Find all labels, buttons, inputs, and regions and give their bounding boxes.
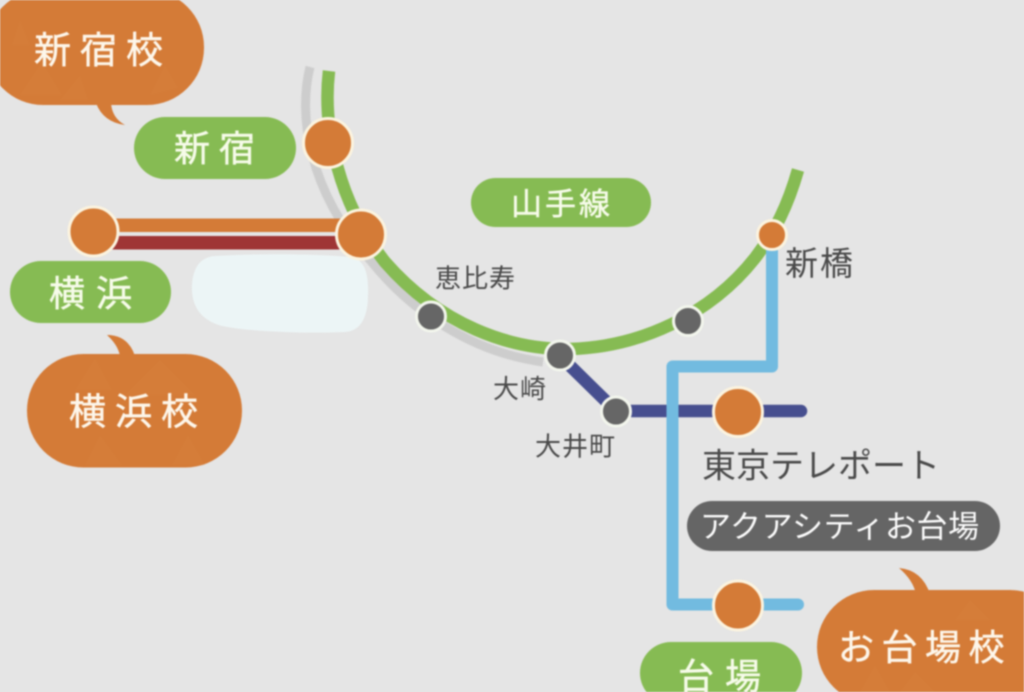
- Rinkai blue line: [672, 240, 798, 604]
- label: Shinjuku: 新宿: [174, 128, 264, 169]
- label: Yamanote line: 山手線: [511, 187, 613, 222]
- label: Shimbashi: 新橋: [785, 245, 855, 282]
- Oimachi navy line: [560, 356, 801, 411]
- label: Aqua City Odaiba: [687, 501, 1000, 551]
- callout: Odaiba school: [817, 568, 1024, 692]
- label: Aqua City Odaiba: アクアシティお台場: [700, 510, 980, 544]
- label: Yamanote line: [471, 178, 651, 227]
- station: upper right gray: [674, 306, 702, 336]
- label: Oimachi: 大井町: [535, 432, 616, 462]
- station: Shibuya junction: [336, 210, 386, 259]
- station: Oimachi: [602, 397, 630, 426]
- label: Shinjuku: [134, 117, 296, 179]
- label: Tokyo Teleport: 東京テレポート: [702, 448, 940, 486]
- station: Ebisu: [416, 302, 446, 331]
- label: Yokohama: [10, 261, 171, 323]
- station: Osaki: [546, 341, 574, 370]
- label: Yokohama: 横浜: [49, 273, 143, 314]
- Yokohama orange line: [110, 218, 345, 232]
- Yokohama red line: [110, 236, 345, 250]
- gray parallel track: [306, 67, 543, 362]
- station: Daiba: [714, 581, 762, 630]
- callout: Yokohama school: 横浜校: [69, 392, 207, 432]
- station: Tokyo Teleport: [714, 388, 762, 436]
- Yamanote line green track: [328, 71, 798, 349]
- callout: Yokohama school: [27, 335, 242, 468]
- station: Shinjuku: [304, 118, 352, 168]
- pale cloud patch: [192, 254, 368, 333]
- callout: Shinjuku school: [0, 0, 204, 125]
- label: Ebisu: 恵比寿: [435, 264, 516, 294]
- label: Daiba: [640, 642, 802, 692]
- label: Osaki: 大崎: [493, 374, 547, 404]
- station: Yokohama: [69, 207, 118, 256]
- station: Shimbashi: [758, 220, 786, 250]
- callout: Shinjuku school: 新宿校: [34, 30, 172, 71]
- callout: Odaiba school: お台場校: [838, 627, 1012, 668]
